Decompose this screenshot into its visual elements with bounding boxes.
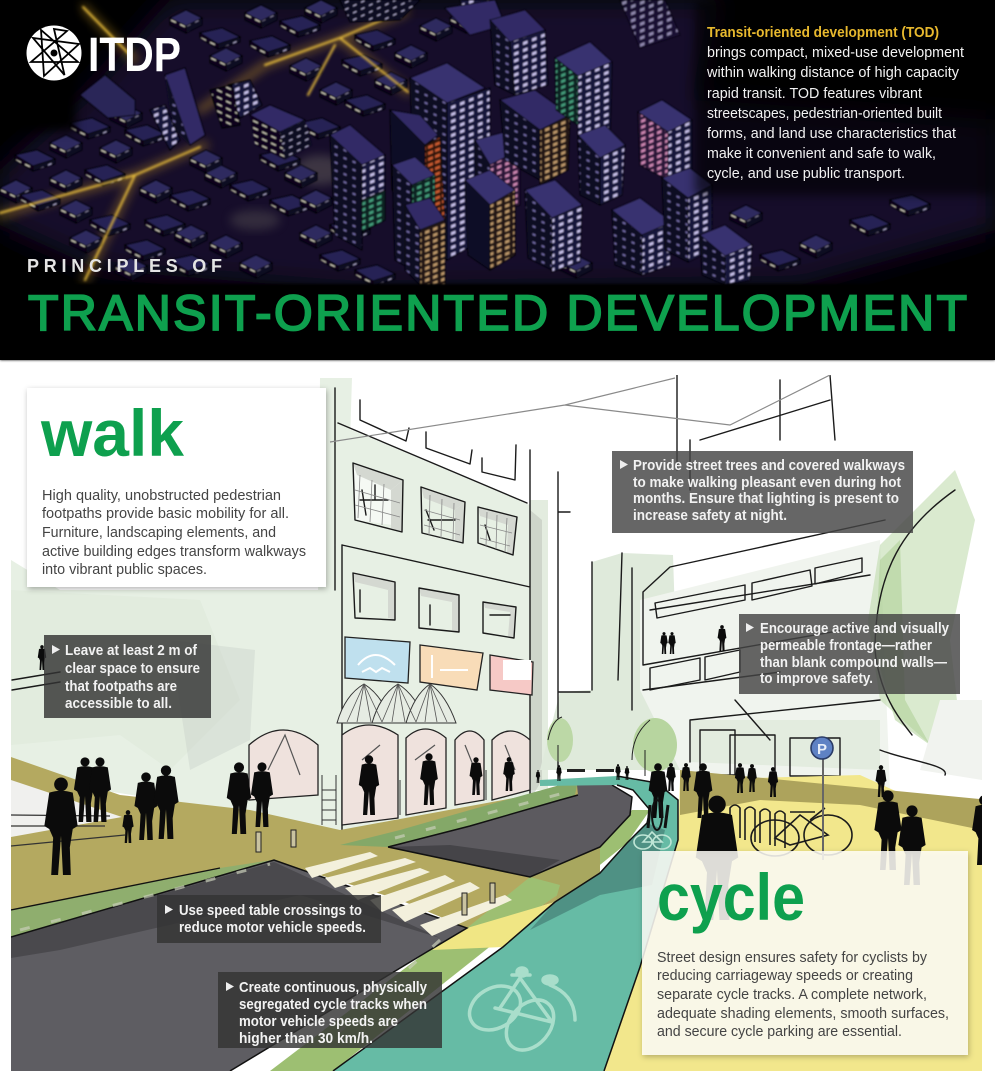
cycle description: adequate shading elements, smooth surfaces, xyxy=(657,1005,949,1022)
cycle description: reducing carriageway speeds or creating xyxy=(657,967,913,984)
trees in the distance xyxy=(547,717,677,776)
callout: segregated cycle tracks: segregated cycle tracks when xyxy=(239,996,427,1013)
cycle track xyxy=(333,776,678,1071)
callout: segregated cycle tracks: Create continuous, physically xyxy=(239,979,428,996)
logo: ITDP xyxy=(26,26,181,82)
building sketch lines xyxy=(12,375,955,840)
intro text block: TOD definition: within walking distance of high capacity xyxy=(706,65,960,81)
callout: segregated cycle tracks xyxy=(218,972,442,1048)
callout: active frontage: permeable frontage—rather xyxy=(760,637,932,654)
intro text block: TOD definition: streetscapes, pedestrian-oriented built xyxy=(707,106,942,122)
callout: street trees and lighting: months. Ensure that lighting is present to xyxy=(633,490,899,507)
ground: pavements xyxy=(11,757,990,1071)
intro text block: TOD definition xyxy=(706,25,964,182)
callout: segregated cycle tracks: higher than 30 km/h. xyxy=(239,1030,373,1047)
city blocks xyxy=(0,0,930,286)
walk description: High quality, unobstructed pedestrian xyxy=(42,487,281,504)
cycle description: and secure cycle parking are essential. xyxy=(657,1023,902,1040)
walk description: into vibrant public spaces. xyxy=(42,561,207,578)
icon: small bicycle marking xyxy=(634,832,671,849)
panel: cycle xyxy=(642,851,968,1055)
intro text block: TOD definition: rapid transit. TOD features vibrant xyxy=(707,86,922,102)
callout: street trees and lighting: increase safety at night. xyxy=(633,507,787,524)
shop banners xyxy=(345,637,533,695)
callout: clear footpath space: Leave at least 2 m of xyxy=(65,642,198,659)
people silhouettes xyxy=(38,625,995,920)
motor vehicle road xyxy=(11,785,632,1071)
panel: walk xyxy=(27,388,326,587)
high-rise towers xyxy=(330,0,752,285)
title: TRANSIT-ORIENTED DEVELOPMENT xyxy=(28,285,967,341)
cycle description: Street design ensures safety for cyclists by xyxy=(657,949,927,966)
heading: walk: walk xyxy=(40,396,184,470)
intro text block: TOD definition: brings compact, mixed-use development xyxy=(707,45,964,61)
callout: speed table crossings: reduce motor vehicle speeds. xyxy=(179,919,366,936)
callout: clear footpath space: that footpaths are xyxy=(65,678,177,695)
callout: active frontage xyxy=(739,614,960,694)
icon: bicycle road marking xyxy=(462,968,575,1059)
buildings xyxy=(11,378,982,830)
callout: street trees and lighting: to make walking pleasant even during hot xyxy=(633,474,901,491)
title xyxy=(27,256,967,341)
arcades and shop windows xyxy=(249,684,530,825)
walk description: Furniture, landscaping elements, and xyxy=(42,524,276,541)
intro text block: TOD definition: forms, and land use characteristics that xyxy=(707,126,956,142)
callout: active frontage: than blank compound walls— xyxy=(760,654,947,671)
callout: street trees and lighting: Provide street trees and covered walkways xyxy=(633,457,905,474)
intro text block: TOD definition: make it convenient and safe to walk, xyxy=(707,146,936,162)
header: night-time city aerial banner xyxy=(0,0,995,360)
intro text block: TOD definition: Transit-oriented development (TOD) xyxy=(707,25,939,41)
logo: ITDP: ITDP xyxy=(88,29,181,82)
callout: clear footpath space: clear space to ensure xyxy=(65,660,200,677)
heading: cycle: cycle xyxy=(657,860,805,934)
callout: clear footpath space xyxy=(44,635,211,718)
walk description: footpaths provide basic mobility for all. xyxy=(42,505,289,522)
walk description xyxy=(42,487,306,578)
zebra crossing xyxy=(256,830,512,936)
callout: active frontage: to improve safety. xyxy=(760,670,873,687)
intro text block: TOD definition: cycle, and use public transport. xyxy=(707,166,905,182)
street scene illustration xyxy=(11,375,995,1071)
callout: speed table crossings xyxy=(157,895,381,943)
bicycle parking and sign: P xyxy=(817,741,827,758)
callout: speed table crossings: Use speed table crossings to xyxy=(179,902,362,919)
bicycle parking and sign xyxy=(730,737,852,860)
callout: clear footpath space: accessible to all. xyxy=(65,695,172,712)
callout: street trees and lighting xyxy=(612,451,913,533)
walk description: active building edges transform walkways xyxy=(42,543,306,560)
callout: segregated cycle tracks: motor vehicle speeds are xyxy=(239,1013,398,1030)
cycle description xyxy=(657,949,949,1040)
callout: active frontage: Encourage active and visually xyxy=(760,620,950,637)
cycle description: separate cycle tracks. A complete network, xyxy=(657,986,927,1003)
title: PRINCIPLES OF xyxy=(27,256,222,276)
